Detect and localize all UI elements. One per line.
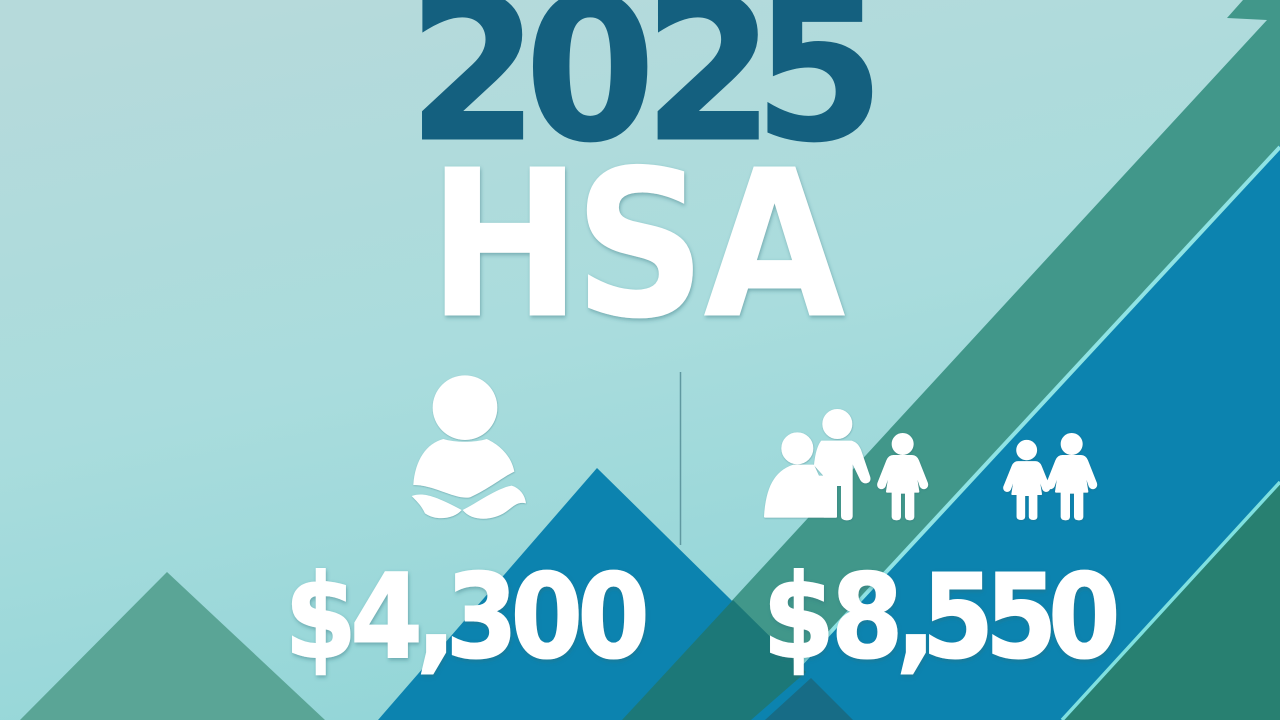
left green mountain	[20, 572, 325, 720]
center blue mountain	[378, 468, 853, 720]
mountain and green band overlap	[622, 600, 806, 720]
title: HSA: HSA	[428, 127, 845, 363]
amount: individual limit: $4,300	[285, 549, 649, 684]
icon: family group	[765, 410, 1096, 519]
icon: individual person	[412, 375, 526, 519]
dark green corner band	[1062, 482, 1280, 720]
child three	[1047, 434, 1096, 519]
seated adult	[765, 433, 836, 517]
standing adult	[815, 410, 869, 519]
green diagonal band	[622, 0, 1280, 720]
amount: family limit: $8,550	[763, 549, 1120, 684]
blue diagonal band	[751, 145, 1280, 720]
child one	[878, 434, 927, 519]
divider	[680, 372, 682, 545]
light stripe: upper diagonal	[749, 147, 1280, 720]
child two	[1004, 441, 1049, 519]
mountain and blue band overlap	[765, 678, 853, 720]
light stripe: lower diagonal	[1062, 482, 1280, 720]
